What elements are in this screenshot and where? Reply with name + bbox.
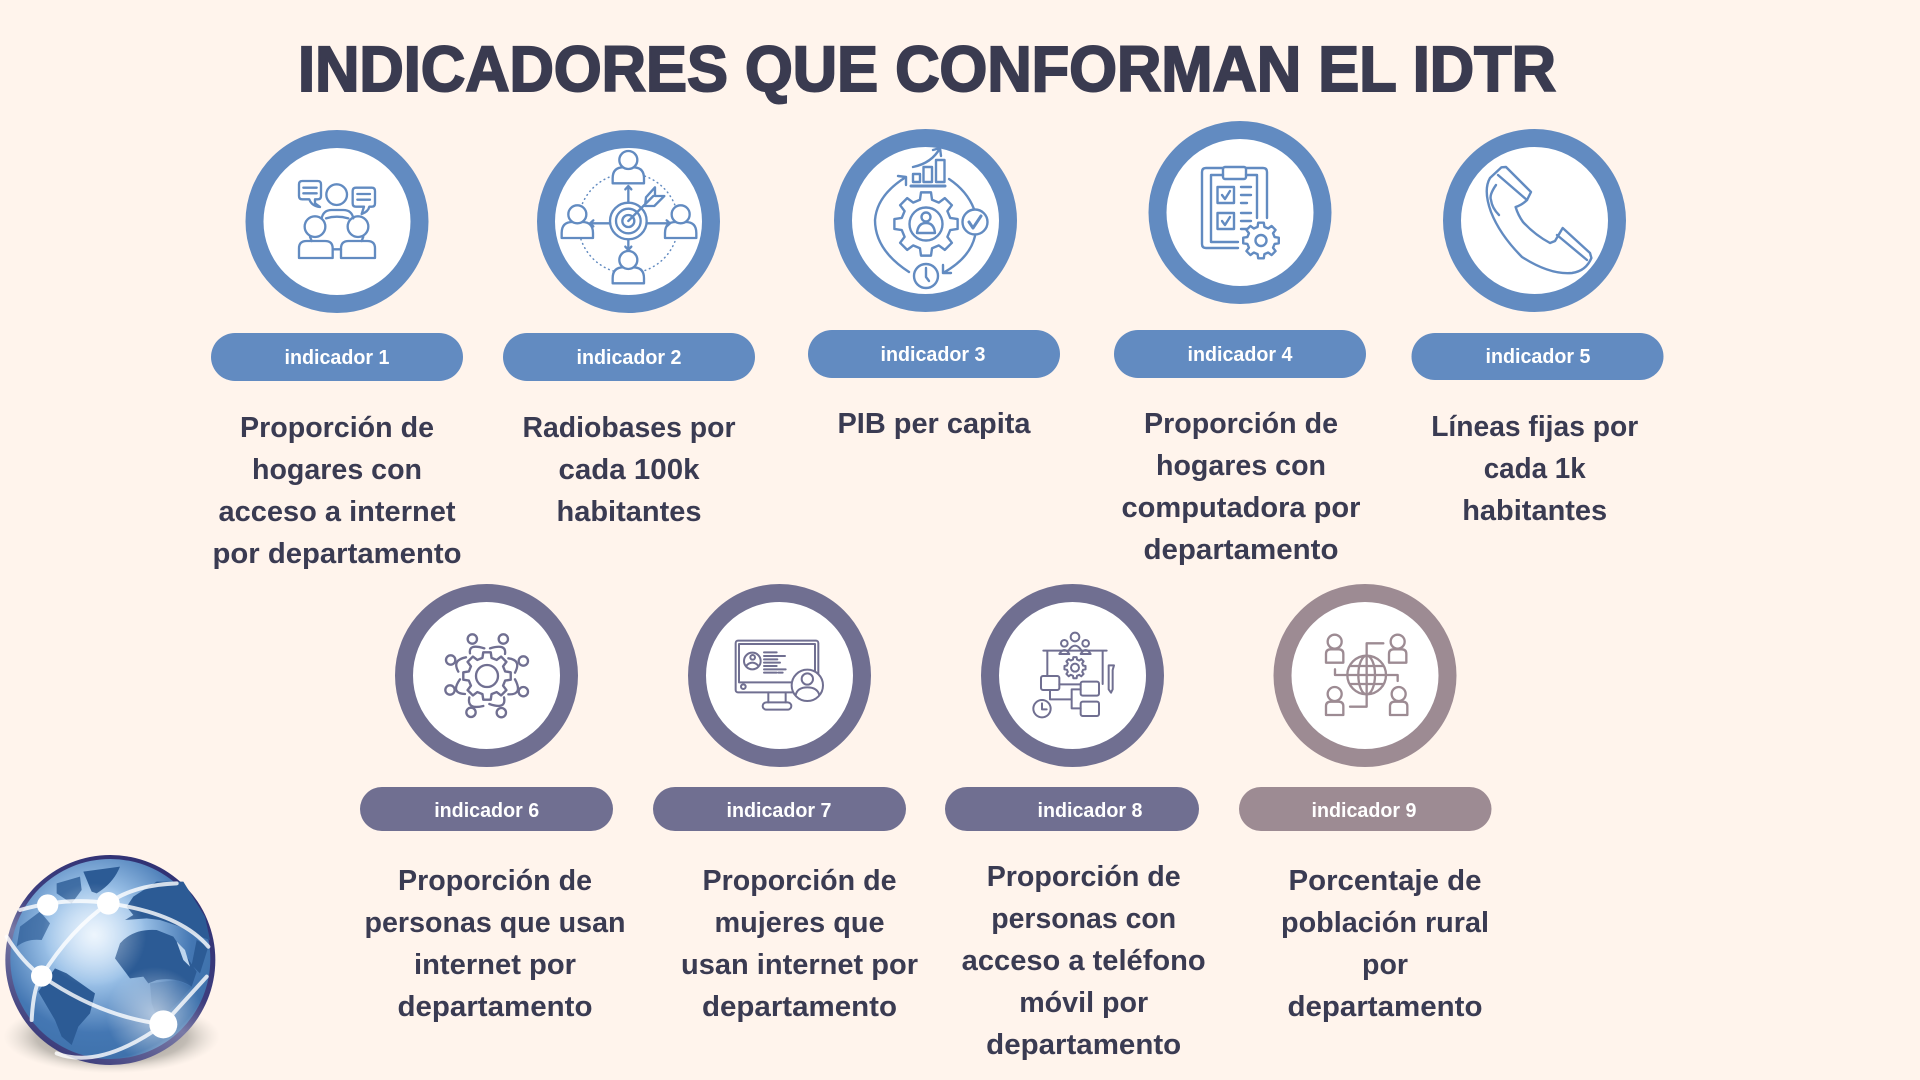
description text: computadora por: [1122, 492, 1360, 524]
label pill: indicador 9: [1312, 800, 1416, 822]
icon: network globe: [3, 855, 220, 1073]
label pill: [1412, 333, 1664, 380]
description text: Proporción de: [398, 865, 592, 897]
ring circle: [254, 139, 420, 304]
description text: cada 1k: [1484, 453, 1587, 485]
description text: [1281, 865, 1489, 1023]
description text: Proporción de: [702, 865, 896, 897]
description text: departamento: [1288, 991, 1482, 1023]
label pill: [1239, 787, 1492, 831]
description text: internet por: [414, 949, 576, 981]
label pill: indicador 8: [1038, 800, 1142, 822]
description text: habitantes: [1462, 495, 1607, 527]
description text: [364, 865, 626, 1023]
description text: [212, 412, 462, 570]
icon: gear with cycle and chart: [875, 148, 988, 288]
icon: gear with network nodes: [445, 634, 528, 717]
description text: por: [1362, 949, 1408, 981]
description text: [962, 861, 1206, 1061]
description text: habitantes: [556, 496, 702, 528]
description text: hogares con: [252, 454, 422, 486]
description text: Líneas fijas por: [1431, 411, 1638, 443]
title: INDICADORES QUE CONFORMAN EL IDTR: [298, 33, 1556, 105]
description text: hogares con: [1156, 450, 1326, 482]
description text: Radiobases por: [522, 412, 736, 444]
label pill: [945, 787, 1199, 831]
description text: personas con: [991, 903, 1176, 935]
label pill: [360, 787, 613, 831]
icon: globe and people: [1326, 635, 1407, 715]
label pill: indicador 3: [880, 344, 986, 366]
description text: cada 100k: [558, 454, 700, 486]
label pill: indicador 4: [1188, 344, 1293, 366]
label pill: indicador 5: [1486, 346, 1590, 368]
label pill: indicador 2: [576, 347, 682, 369]
ring circle: [1282, 593, 1448, 758]
label pill: [1114, 330, 1366, 378]
label pill: indicador 1: [284, 347, 390, 369]
icon: target and people: [562, 151, 696, 283]
label pill: [503, 333, 755, 381]
description text: población rural: [1281, 907, 1489, 939]
icon: checklist with gear: [1202, 167, 1279, 258]
ring circle: [1158, 130, 1322, 295]
icon: people talking: [299, 181, 375, 258]
ring circle: [990, 593, 1155, 758]
description text: PIB per capita: [838, 408, 1031, 440]
description text: Proporción de: [240, 412, 434, 444]
description text: usan internet por: [681, 949, 918, 981]
panel: indicador 4: [1114, 130, 1366, 566]
description text: departamento: [702, 991, 897, 1023]
description text: [1122, 408, 1360, 566]
description text: móvil por: [1019, 987, 1148, 1019]
description text: [681, 865, 918, 1023]
label pill: indicador 7: [726, 800, 832, 822]
description text: acceso a teléfono: [962, 945, 1206, 977]
description text: [1431, 411, 1638, 527]
panel: indicador 9: [1239, 593, 1492, 1023]
label pill: [808, 330, 1060, 378]
label pill: indicador 6: [434, 800, 539, 822]
ring circle: [546, 139, 711, 304]
description text: departamento: [398, 991, 592, 1023]
description text: Porcentaje de: [1288, 865, 1482, 897]
ring circle: [404, 593, 569, 758]
description text: [522, 412, 736, 528]
icon: team and flowchart: [1033, 633, 1114, 717]
panel: indicador 6: [360, 593, 626, 1023]
panel: indicador 5: [1412, 138, 1664, 527]
description text: acceso a internet: [218, 496, 456, 528]
description text: personas que usan: [364, 907, 626, 939]
panel: indicador 2: [503, 139, 755, 528]
panel: indicador 1: [211, 139, 463, 570]
icon: telephone handset: [1487, 167, 1591, 273]
panel: indicador 3: [808, 138, 1060, 440]
description text: departamento: [986, 1029, 1181, 1061]
panel: indicador 7: [653, 593, 918, 1023]
label pill: [211, 333, 463, 381]
description text: mujeres que: [714, 907, 884, 939]
panel: indicador 8: [945, 593, 1206, 1061]
description text: Proporción de: [1144, 408, 1338, 440]
ring circle: [843, 138, 1008, 303]
label pill: [653, 787, 906, 831]
icon: monitor with user: [736, 641, 823, 710]
description text: por departamento: [212, 538, 462, 570]
ring circle: [1452, 138, 1617, 303]
ring circle: [697, 593, 862, 758]
description text: Proporción de: [987, 861, 1181, 893]
description text: departamento: [1144, 534, 1338, 566]
